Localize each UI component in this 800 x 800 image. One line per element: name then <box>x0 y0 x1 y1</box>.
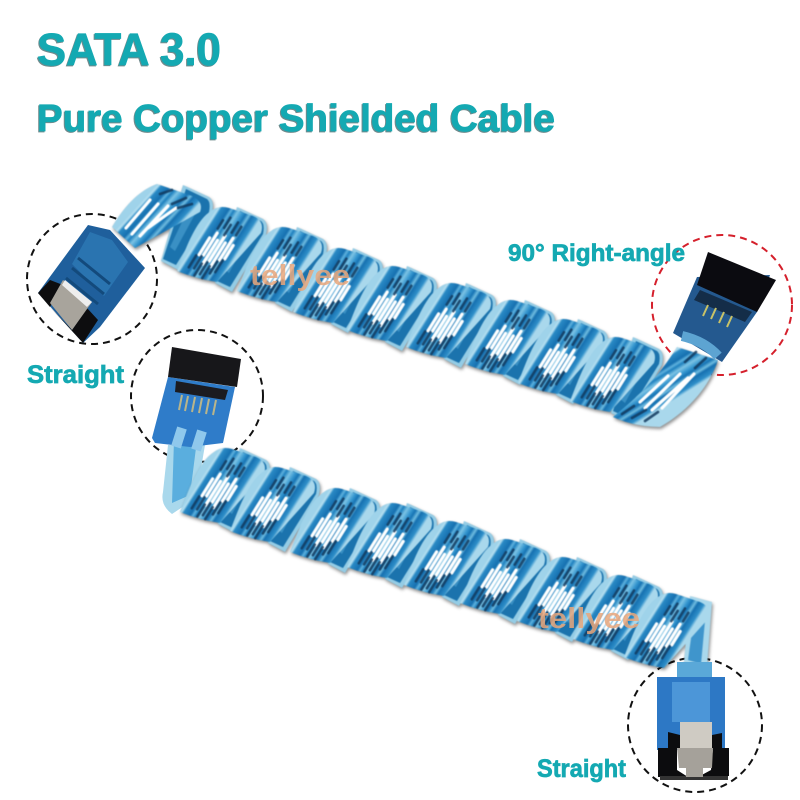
lead from connector to lower coil <box>162 445 205 514</box>
subtitle: Pure Copper Shielded Cable: Pure Copper Shielded Cable <box>37 98 555 140</box>
watermark: tellyee lower: tellyee <box>538 603 640 635</box>
watermark: tellyee upper: tellyee <box>250 260 350 292</box>
dashed circle: red right-angle connector <box>652 235 792 375</box>
title: SATA 3.0: SATA 3.0 <box>37 24 221 75</box>
label: 90° Right-angle: 90° Right-angle <box>508 240 685 267</box>
connector: right-angle <box>673 252 776 362</box>
connector: middle straight <box>152 347 241 514</box>
upper coiled cable <box>112 184 718 427</box>
subtitle: Pure Copper Shielded Cable: Pure Copper Shielded Cable <box>36 99 554 141</box>
dashed circle: bottom-right connector <box>628 658 762 792</box>
last strand into right-angle connector <box>613 347 718 427</box>
strand before last <box>570 337 655 412</box>
lower coiled cable <box>180 448 712 668</box>
label: Straight (bottom): Straight <box>537 755 627 783</box>
last strand into bottom connector <box>684 596 712 668</box>
connector: bottom straight <box>657 662 729 780</box>
connector: top-left straight <box>38 225 145 343</box>
dashed circle: top-left connector <box>27 214 157 344</box>
dashed circle: middle connector <box>131 330 263 462</box>
first strand from top-left connector <box>112 184 201 248</box>
label: Straight (left): Straight <box>27 361 125 389</box>
title: SATA 3.0: SATA 3.0 <box>36 25 220 76</box>
